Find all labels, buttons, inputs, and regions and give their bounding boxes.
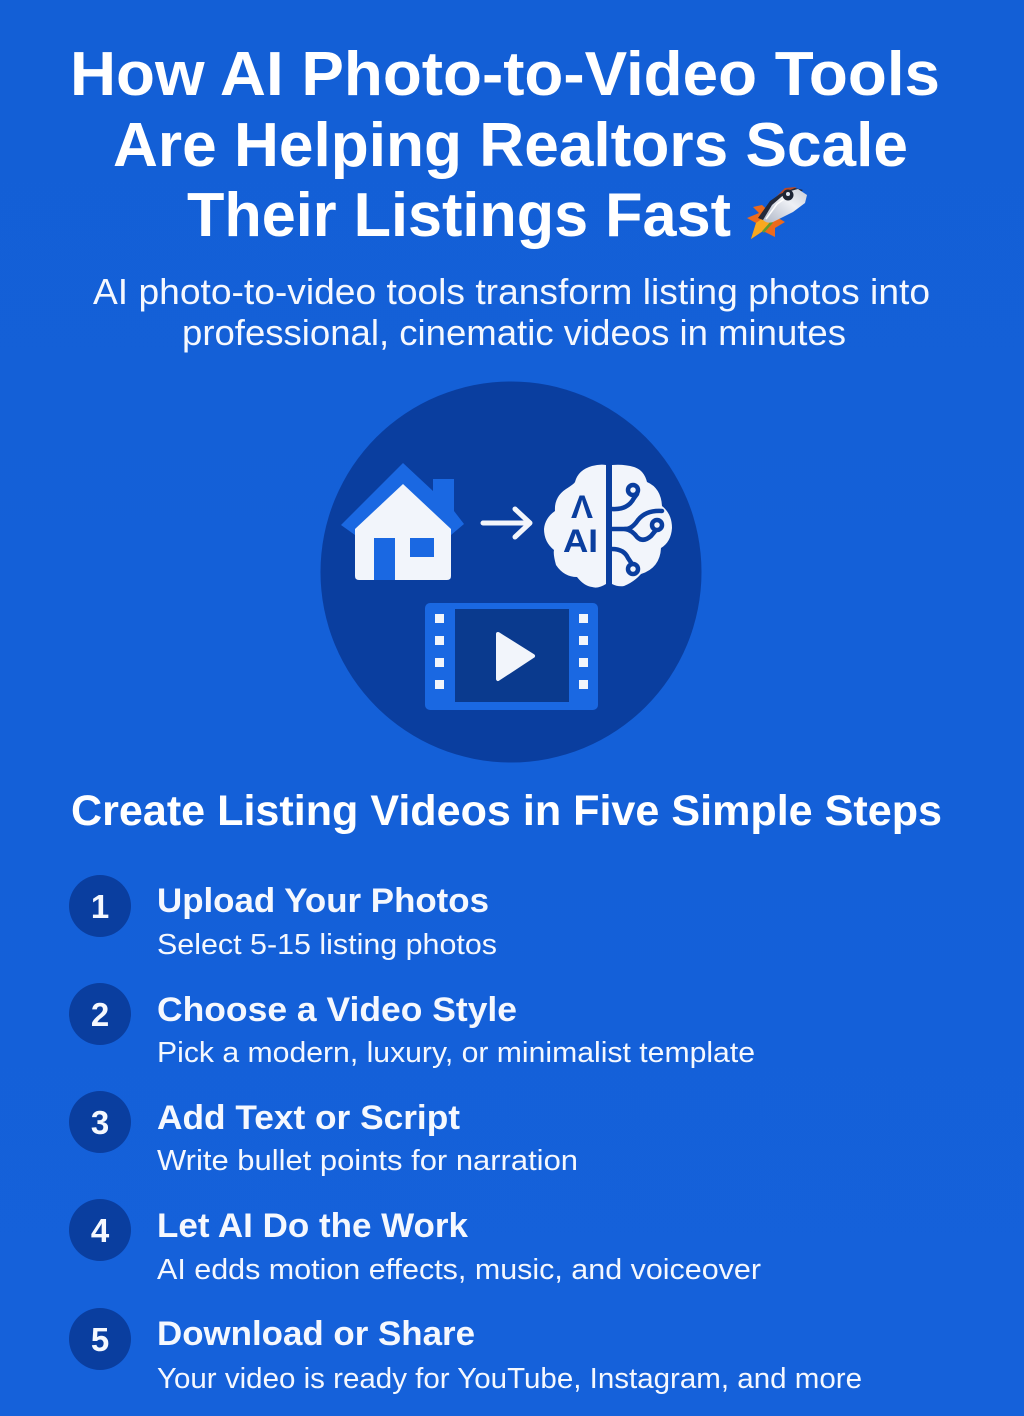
step 3: 3 bbox=[91, 1104, 109, 1141]
step 5: Download or Share bbox=[157, 1315, 475, 1353]
step 5: 5 bbox=[91, 1321, 109, 1358]
title: How AI Photo-to-Video Tools bbox=[70, 40, 940, 109]
icon: AI brain: AI bbox=[563, 523, 598, 559]
title: Their Listings Fast bbox=[187, 181, 731, 250]
step 4: 4 bbox=[91, 1212, 110, 1249]
icon: house bbox=[341, 463, 464, 580]
icon: rocket bbox=[747, 187, 807, 239]
title: Are Helping Realtors Scale bbox=[113, 111, 908, 180]
step 1: Select 5-15 listing photos bbox=[157, 929, 497, 961]
step 3 bbox=[69, 1091, 578, 1177]
step 5: Your video is ready for YouTube, Instagram, and more bbox=[157, 1363, 862, 1395]
step 1: 1 bbox=[91, 888, 109, 925]
icon: AI brain bbox=[544, 465, 672, 588]
step 4: Let AI Do the Work bbox=[157, 1207, 468, 1245]
step 2: 2 bbox=[91, 996, 109, 1033]
subtitle: AI photo-to-video tools transform listing photos into bbox=[93, 271, 930, 312]
step 2 bbox=[69, 983, 755, 1069]
panel: hero circle illustration bbox=[320, 382, 702, 762]
step 1 bbox=[69, 875, 497, 961]
step 1: Upload Your Photos bbox=[157, 882, 489, 920]
step 3: Write bullet points for narration bbox=[157, 1145, 578, 1177]
subtitle bbox=[93, 271, 930, 353]
step 2: Choose a Video Style bbox=[157, 991, 517, 1029]
step 3: Add Text or Script bbox=[157, 1099, 460, 1137]
heading: five simple steps: Create Listing Videos in Five Simple Steps bbox=[71, 787, 942, 835]
step 4 bbox=[69, 1199, 761, 1286]
step 4: AI edds motion effects, music, and voiceover bbox=[157, 1254, 761, 1286]
subtitle: professional, cinematic videos in minutes bbox=[182, 312, 846, 353]
title bbox=[70, 40, 940, 250]
step 2: Pick a modern, luxury, or minimalist template bbox=[157, 1037, 755, 1069]
icon: video film strip bbox=[425, 603, 598, 710]
icon: arrow bbox=[483, 509, 530, 537]
step 5 bbox=[69, 1308, 862, 1395]
icon: AI brain: Λ bbox=[571, 489, 594, 525]
